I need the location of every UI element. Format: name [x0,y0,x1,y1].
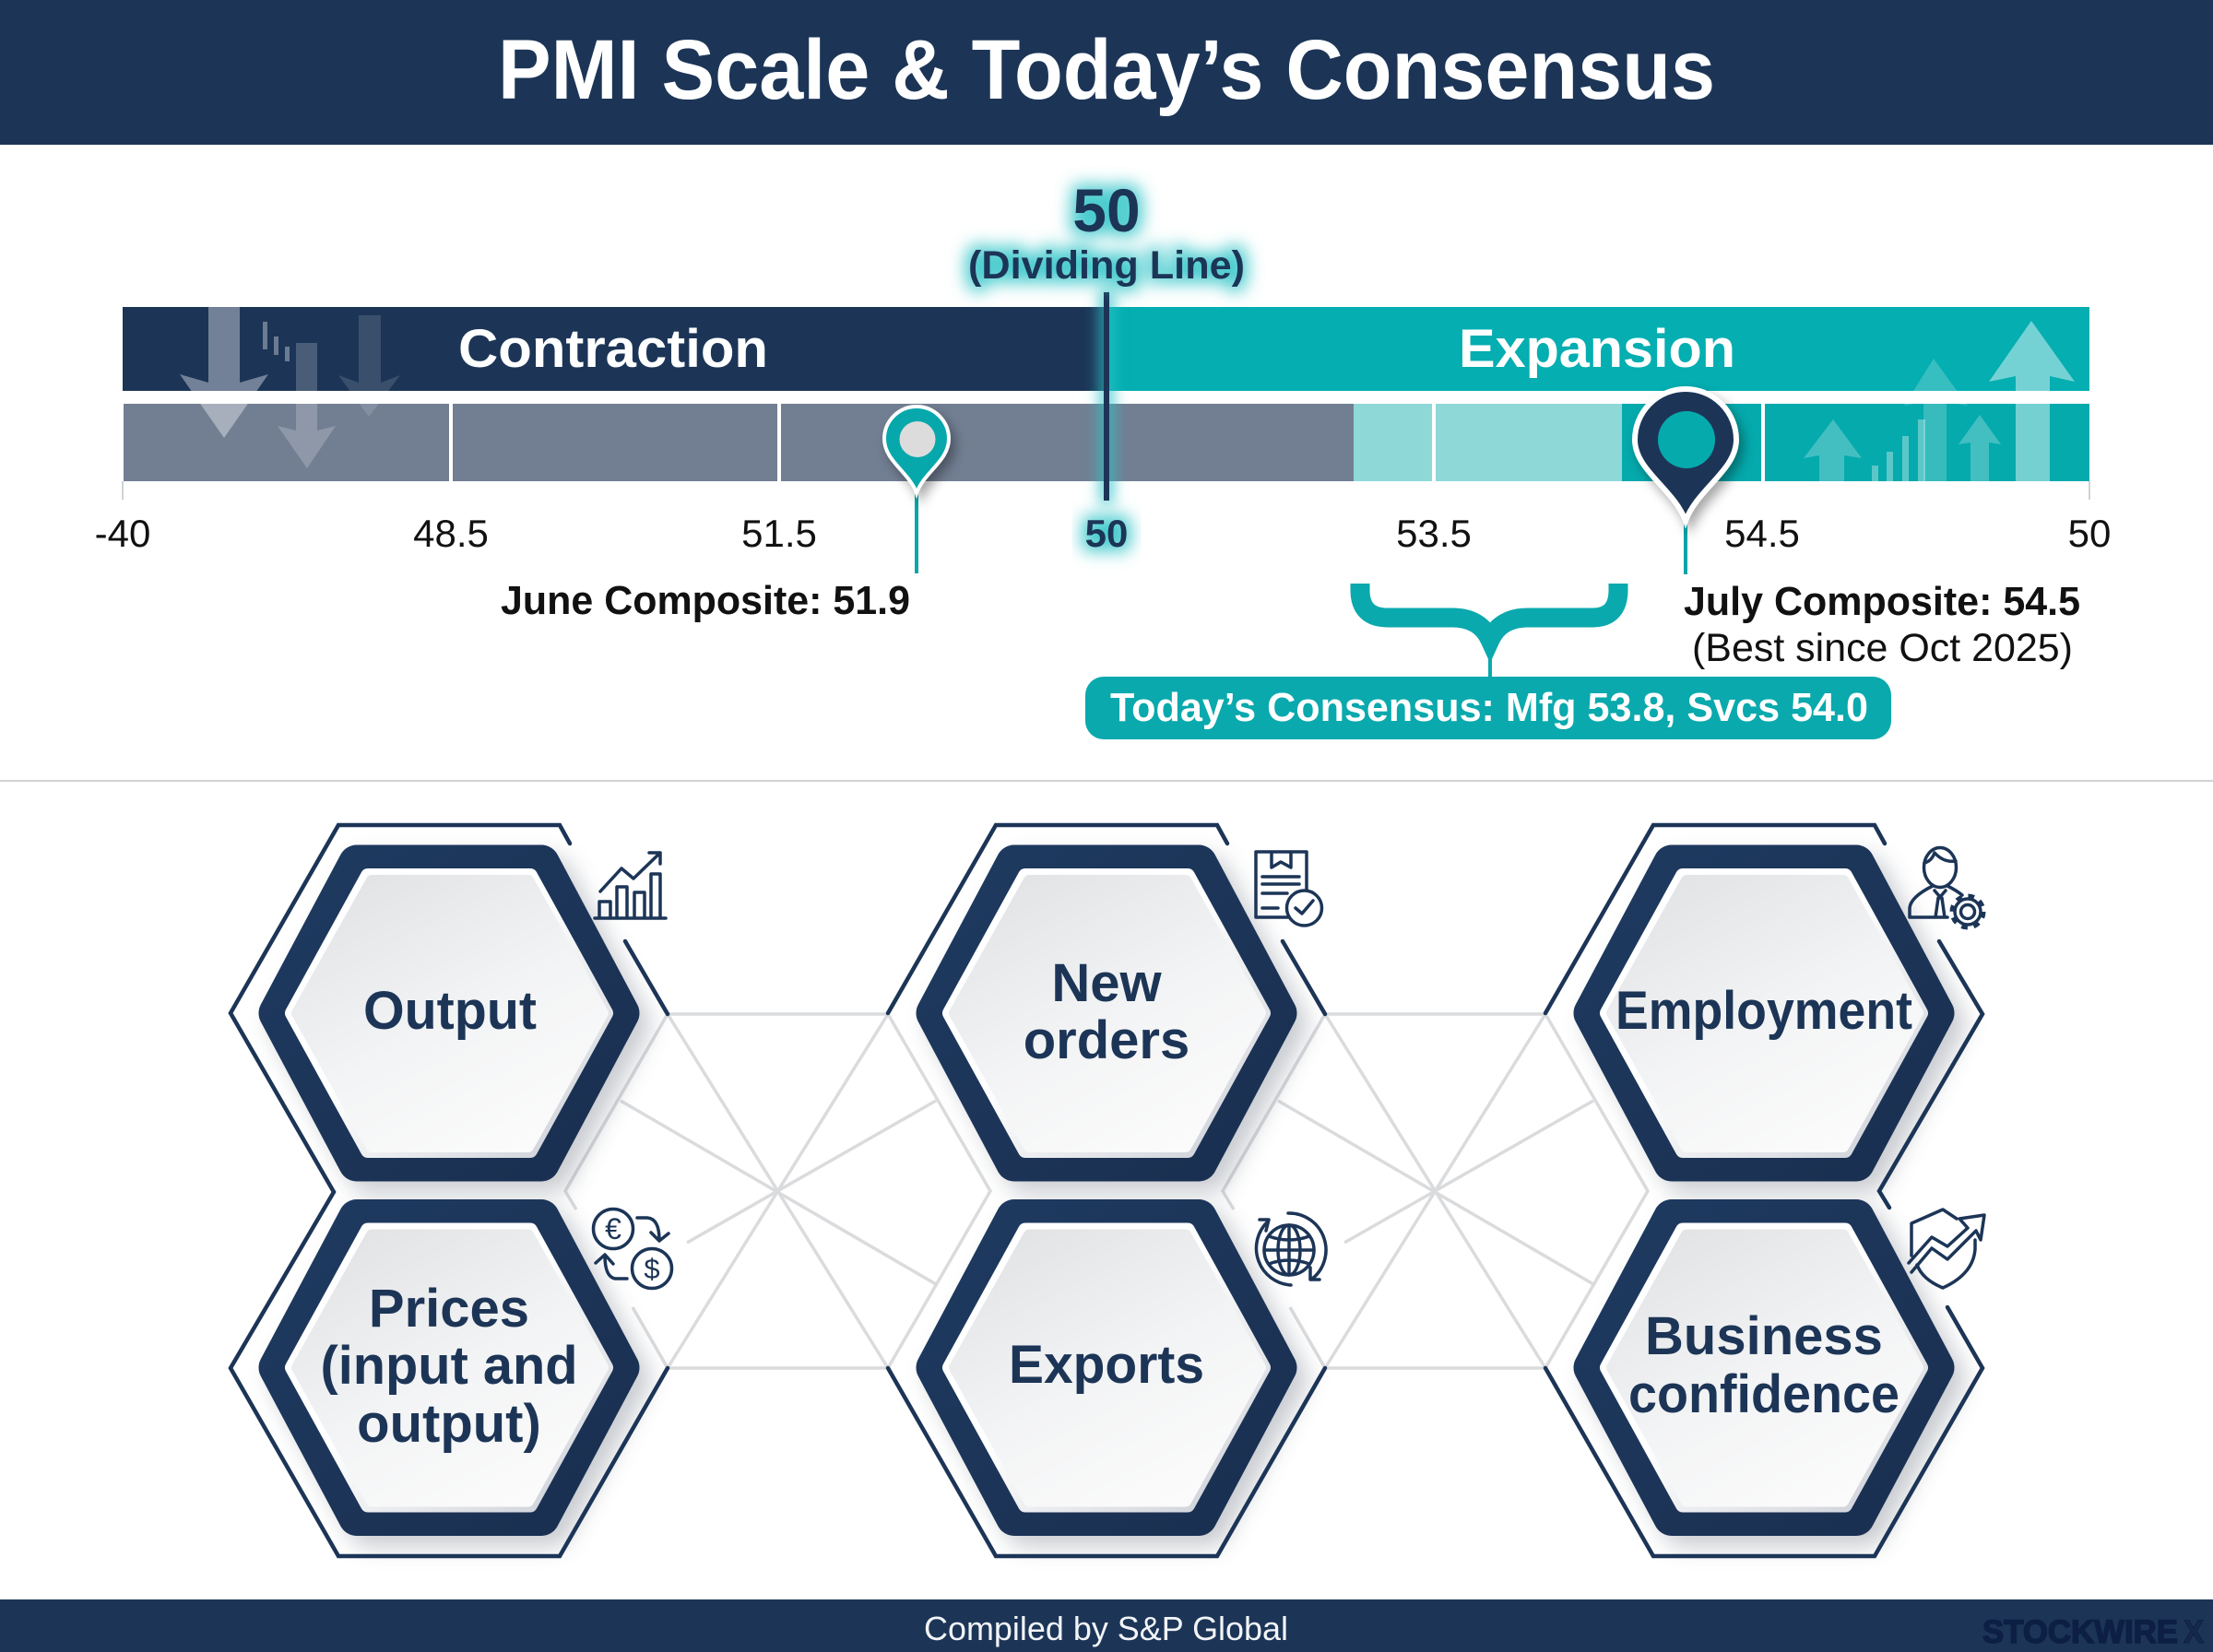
axis labels: 53.5 [1396,512,1472,555]
label: New orders: New [1051,953,1163,1013]
watermark: X [2183,1614,2205,1650]
icon: currency exchange [594,1210,671,1289]
axis labels: 54.5 [1724,512,1800,555]
axis labels: -40 [95,512,150,555]
hexagon: New orders [888,825,1325,1163]
dividing value 50: 50 [1072,176,1141,244]
label: Business confidence: Business [1645,1306,1883,1366]
icon: person with gear [1910,848,1983,927]
axis labels: 51.5 [741,512,817,555]
hexagon: Exports [888,1218,1325,1556]
hexagon: Business confidence: confidence [1628,1364,1899,1424]
consensus pill: Today’s Consensus: Mfg 53.8, Svcs 54.0 [1110,685,1868,730]
axis labels: 50 [2068,512,2111,555]
hexagon: New orders: orders [1024,1010,1189,1070]
icon: document with check [1256,852,1322,926]
hexagon: Prices [231,1192,668,1556]
expansion label: Expansion [1459,319,1735,379]
label: Prices (input and output): Prices [369,1279,529,1339]
label: Employment: Employment [1615,981,1912,1041]
section divider [0,780,2213,782]
icon: contraction down arrows [180,307,400,468]
icon: shield with growth arrow [1909,1210,1984,1288]
icon: currency exchange: € [605,1212,621,1245]
watermark: STOCKWIRE [1982,1614,2178,1650]
marker: July composite [1635,389,1736,574]
July label: July Composite: 54.5 [1684,579,2080,624]
axis labels [95,512,2111,555]
header band [0,0,2213,145]
icon: currency exchange: $ [644,1253,660,1285]
title: PMI Scale & Today’s Consensus [498,23,1715,117]
axis labels: 48.5 [413,512,489,555]
July note: (Best since Oct 2025) [1692,626,2073,670]
June label: June Composite: 51.9 [501,578,910,623]
marker: June composite [884,407,949,573]
contraction label: Contraction [458,319,768,379]
hexagon: Employment [1545,825,1982,1208]
consensus pill [1085,677,1891,739]
consensus brace [1360,584,1618,678]
hexagon: Prices: (input and [321,1336,577,1396]
icon: expansion up arrows [1804,321,2075,481]
hexagon: Prices: output) [357,1394,541,1454]
label: Output: Output [363,981,537,1041]
dividing line caption: (Dividing Line) [968,243,1245,288]
panel: PMI scale [95,176,2111,739]
footer credit: Compiled by S&P Global [924,1610,1288,1647]
connector lines [565,1014,1648,1368]
hexagon: Business confidence [1545,1218,1982,1556]
scale track [122,404,2090,500]
label: Exports: Exports [1009,1335,1204,1395]
hexagon: Output [231,825,668,1192]
icon: globe with arrows [1256,1213,1326,1285]
axis labels: 50 [1085,512,1128,555]
expansion bar [1106,307,2089,391]
dividing line [1104,292,1109,501]
contraction bar [123,307,1106,391]
footer band [0,1599,2213,1652]
icon: bar chart with trend arrow [595,853,666,918]
